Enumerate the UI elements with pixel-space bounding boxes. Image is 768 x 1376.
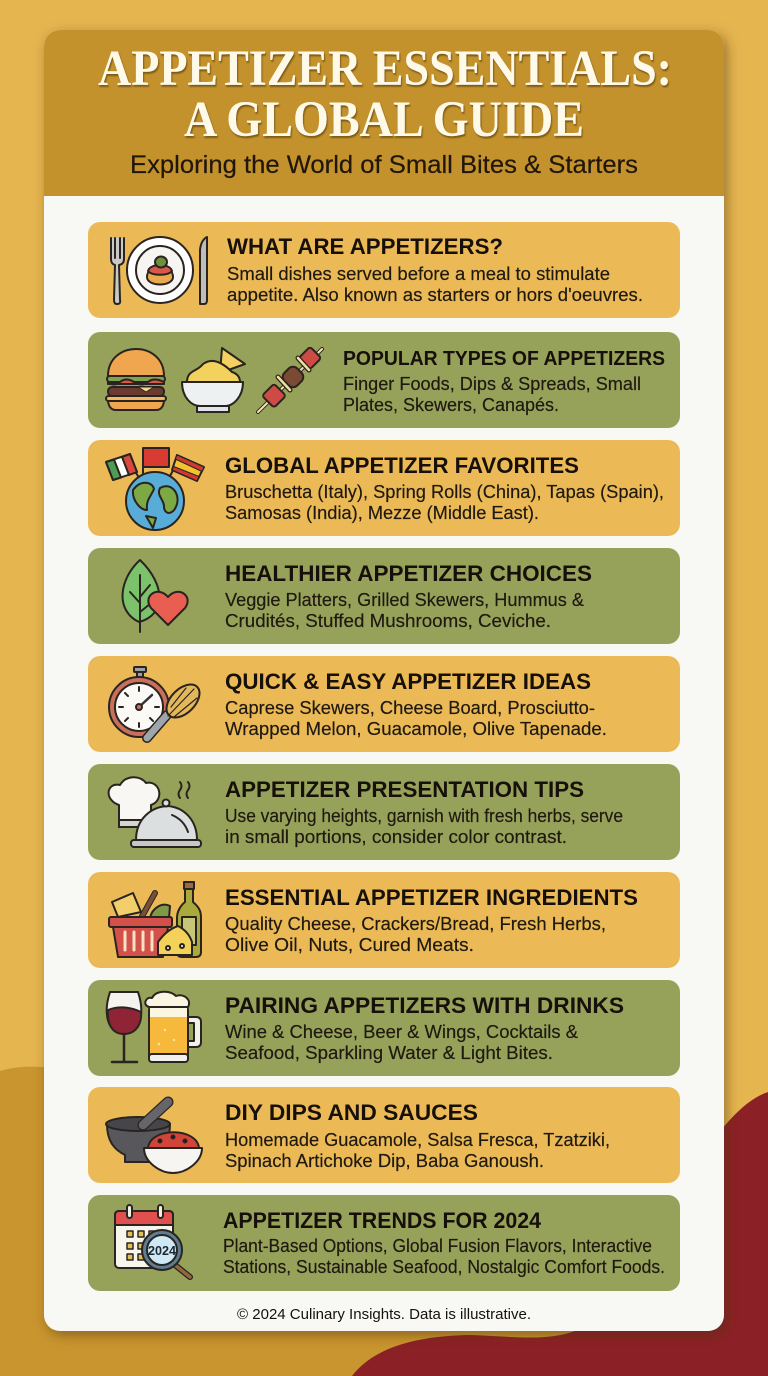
description <box>225 482 664 523</box>
panel: pairing with drinks <box>88 980 680 1076</box>
decorative hill: dark red <box>352 1092 768 1376</box>
description: Quality Cheese, Crackers/Bread, Fresh Herbs, <box>225 914 606 934</box>
heading: WHAT ARE APPETIZERS? <box>227 234 503 259</box>
footer: © 2024 Culinary Insights. Data is illustrative. <box>237 1306 531 1323</box>
panel: DIY dips <box>88 1087 680 1183</box>
icon: chef hat and cloche <box>109 777 201 847</box>
description <box>227 264 643 305</box>
title: APPETIZER ESSENTIALS: <box>98 41 672 97</box>
icon: wine glass and beer mug <box>107 992 201 1062</box>
description <box>225 914 606 955</box>
panel: presentation tips <box>88 764 680 860</box>
icon: globe with flags <box>106 448 204 530</box>
panel: quick and easy <box>88 656 680 752</box>
subtitle: Exploring the World of Small Bites & Starters <box>130 151 638 179</box>
description <box>225 1130 610 1171</box>
description <box>343 374 641 415</box>
description: in small portions, consider color contrast. <box>225 827 567 847</box>
heading: ESSENTIAL APPETIZER INGREDIENTS <box>225 885 638 910</box>
description: Caprese Skewers, Cheese Board, Prosciutto- <box>225 698 595 718</box>
heading: HEALTHIER APPETIZER CHOICES <box>225 561 592 586</box>
icon: calendar and magnifier <box>115 1205 190 1277</box>
description <box>223 1236 665 1277</box>
icon: basket, oil and cheese <box>109 882 201 957</box>
icon: mortar and salsa bowl <box>106 1102 202 1173</box>
description: Small dishes served before a meal to stimulate <box>227 264 610 284</box>
heading: PAIRING APPETIZERS WITH DRINKS <box>225 993 624 1018</box>
description: Bruschetta (Italy), Spring Rolls (China), Tapas (Spain), <box>225 482 664 502</box>
icon: burger, dip bowl and skewer <box>106 347 322 412</box>
description: appetite. Also known as starters or hors d'oeuvres. <box>227 285 643 305</box>
icon: leaf and heart <box>123 560 188 632</box>
heading: DIY DIPS AND SAUCES <box>225 1100 478 1125</box>
description: Homemade Guacamole, Salsa Fresca, Tzatziki, <box>225 1130 610 1150</box>
description: Plates, Skewers, Canapés. <box>343 395 559 415</box>
description: Wine & Cheese, Beer & Wings, Cocktails & <box>225 1022 578 1042</box>
heading: APPETIZER TRENDS FOR 2024 <box>223 1208 542 1233</box>
heading: GLOBAL APPETIZER FAVORITES <box>225 453 579 478</box>
panel: trends <box>88 1195 680 1291</box>
description: Samosas (India), Mezze (Middle East). <box>225 503 539 523</box>
panel: what are appetizers <box>88 222 680 318</box>
title <box>98 41 672 148</box>
heading: QUICK & EASY APPETIZER IDEAS <box>225 669 591 694</box>
description <box>225 1022 578 1063</box>
description: Spinach Artichoke Dip, Baba Ganoush. <box>225 1151 544 1171</box>
description: Veggie Platters, Grilled Skewers, Hummus & <box>225 590 584 610</box>
icon: stopwatch and whisk <box>109 667 206 738</box>
title: A GLOBAL GUIDE <box>184 92 584 148</box>
description <box>225 698 607 739</box>
panel: popular types <box>88 332 680 428</box>
description: Wrapped Melon, Guacamole, Olive Tapenade. <box>225 719 607 739</box>
icon: calendar and magnifier: 2024 <box>148 1243 177 1258</box>
description: Stations, Sustainable Seafood, Nostalgic Comfort Foods. <box>223 1257 665 1277</box>
panel: healthier choices <box>88 548 680 644</box>
panel: global favorites <box>88 440 680 536</box>
description: Finger Foods, Dips & Spreads, Small <box>343 374 641 394</box>
panel: essential ingredients <box>88 872 680 968</box>
header panel <box>44 30 724 196</box>
description: Olive Oil, Nuts, Cured Meats. <box>225 935 474 955</box>
description <box>225 590 584 631</box>
description: Plant-Based Options, Global Fusion Flavors, Interactive <box>223 1236 652 1256</box>
description: Use varying heights, garnish with fresh herbs, serve <box>225 806 623 826</box>
heading: POPULAR TYPES OF APPETIZERS <box>343 347 665 370</box>
icon: plate and cutlery <box>111 237 207 304</box>
description: Crudités, Stuffed Mushrooms, Ceviche. <box>225 611 551 631</box>
decorative hill: gold <box>0 1067 600 1376</box>
description <box>225 806 623 847</box>
heading: APPETIZER PRESENTATION TIPS <box>225 777 584 802</box>
description: Seafood, Sparkling Water & Light Bites. <box>225 1043 553 1063</box>
